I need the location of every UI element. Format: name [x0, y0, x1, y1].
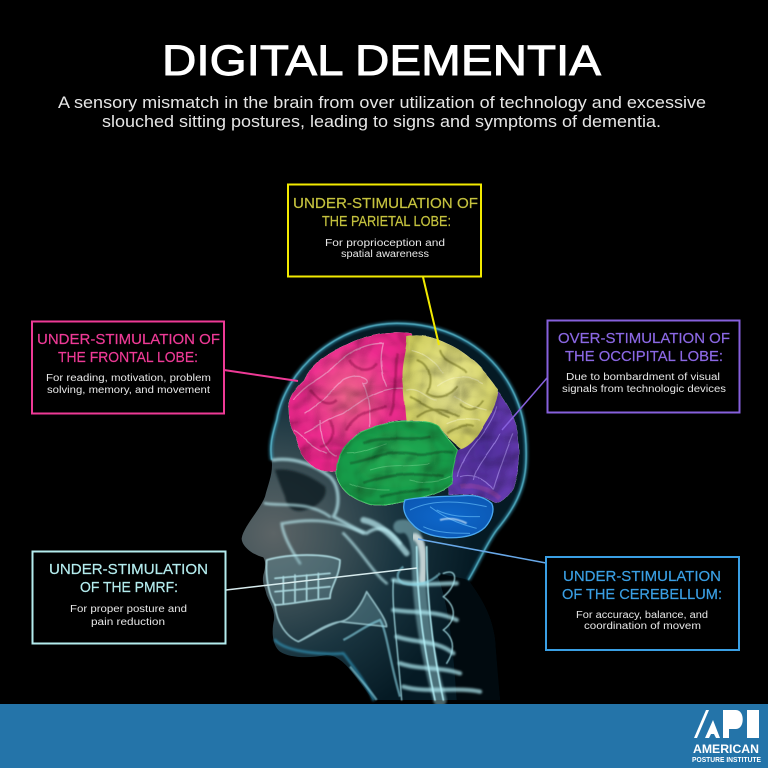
connector: cerebellum	[418, 539, 546, 563]
panel: cerebellum: For accuracy, balance, and	[576, 610, 708, 621]
temporal lobe	[337, 421, 457, 505]
jaw and neck bones	[343, 567, 440, 700]
head illustration	[242, 323, 526, 700]
brain	[288, 333, 519, 505]
cerebellum	[404, 495, 493, 538]
connector: frontal	[224, 370, 298, 381]
skull	[265, 459, 407, 700]
panel: frontal lobe: solving, memory, and movement	[47, 385, 210, 396]
logo: American Posture Institute: AMERICAN	[693, 742, 759, 756]
panel: cerebellum: UNDER-STIMULATION	[563, 569, 721, 585]
panel: PMRF: For proper posture and	[70, 604, 187, 615]
panel: occipital lobe: OVER-STIMULATION OF	[558, 331, 730, 347]
connector: occipital	[502, 378, 547, 430]
back of neck shadow	[437, 573, 500, 700]
occipital lobe	[448, 392, 519, 503]
connector: parietal	[423, 277, 439, 345]
footer band	[0, 704, 768, 768]
panel: frontal lobe: For reading, motivation, problem	[46, 373, 211, 384]
cranium outline	[271, 323, 526, 580]
logo: American Posture Institute	[692, 710, 761, 764]
cranium glow outline	[271, 323, 526, 580]
panel: parietal lobe: spatial awareness	[341, 249, 429, 260]
eye socket shadow	[275, 469, 326, 511]
panel: parietal lobe: For proprioception and	[325, 238, 445, 249]
panel: frontal lobe	[32, 322, 224, 414]
panel: PMRF	[32, 552, 226, 644]
panel: parietal lobe	[288, 184, 481, 276]
panel: occipital lobe	[548, 320, 740, 412]
panel: occipital lobe: Due to bombardment of visual	[566, 372, 720, 383]
frontal lobe	[288, 333, 413, 472]
parietal lobe	[402, 335, 498, 451]
subtitle: A sensory mismatch in the brain from over utilization of technology and excessive	[58, 93, 706, 112]
panel: frontal lobe: THE FRONTAL LOBE:	[58, 350, 198, 366]
panel: occipital lobe: signals from technologic devices	[562, 384, 726, 395]
title: DIGITAL DEMENTIA	[162, 37, 601, 85]
subtitle	[58, 93, 706, 131]
panel: parietal lobe: THE PARIETAL LOBE:	[322, 214, 451, 230]
spine	[393, 526, 480, 700]
panel: PMRF: pain reduction	[91, 617, 165, 628]
connector: PMRF	[226, 568, 417, 590]
panel: PMRF: UNDER-STIMULATION	[49, 562, 208, 578]
panel: parietal lobe: UNDER-STIMULATION OF	[293, 196, 478, 212]
head silhouette	[242, 323, 526, 700]
panel: PMRF: OF THE PMRF:	[80, 580, 178, 596]
subtitle: slouched sitting postures, leading to signs and symptoms of dementia.	[102, 112, 661, 131]
panel: cerebellum: coordination of movem	[584, 621, 701, 632]
panel: cerebellum: OF THE CEREBELLUM:	[562, 587, 722, 603]
panel: cerebellum	[546, 557, 739, 650]
panel: occipital lobe: THE OCCIPITAL LOBE:	[565, 349, 723, 365]
logo: American Posture Institute: POSTURE INSTITUTE	[692, 757, 761, 764]
panel: frontal lobe: UNDER-STIMULATION OF	[37, 332, 220, 348]
